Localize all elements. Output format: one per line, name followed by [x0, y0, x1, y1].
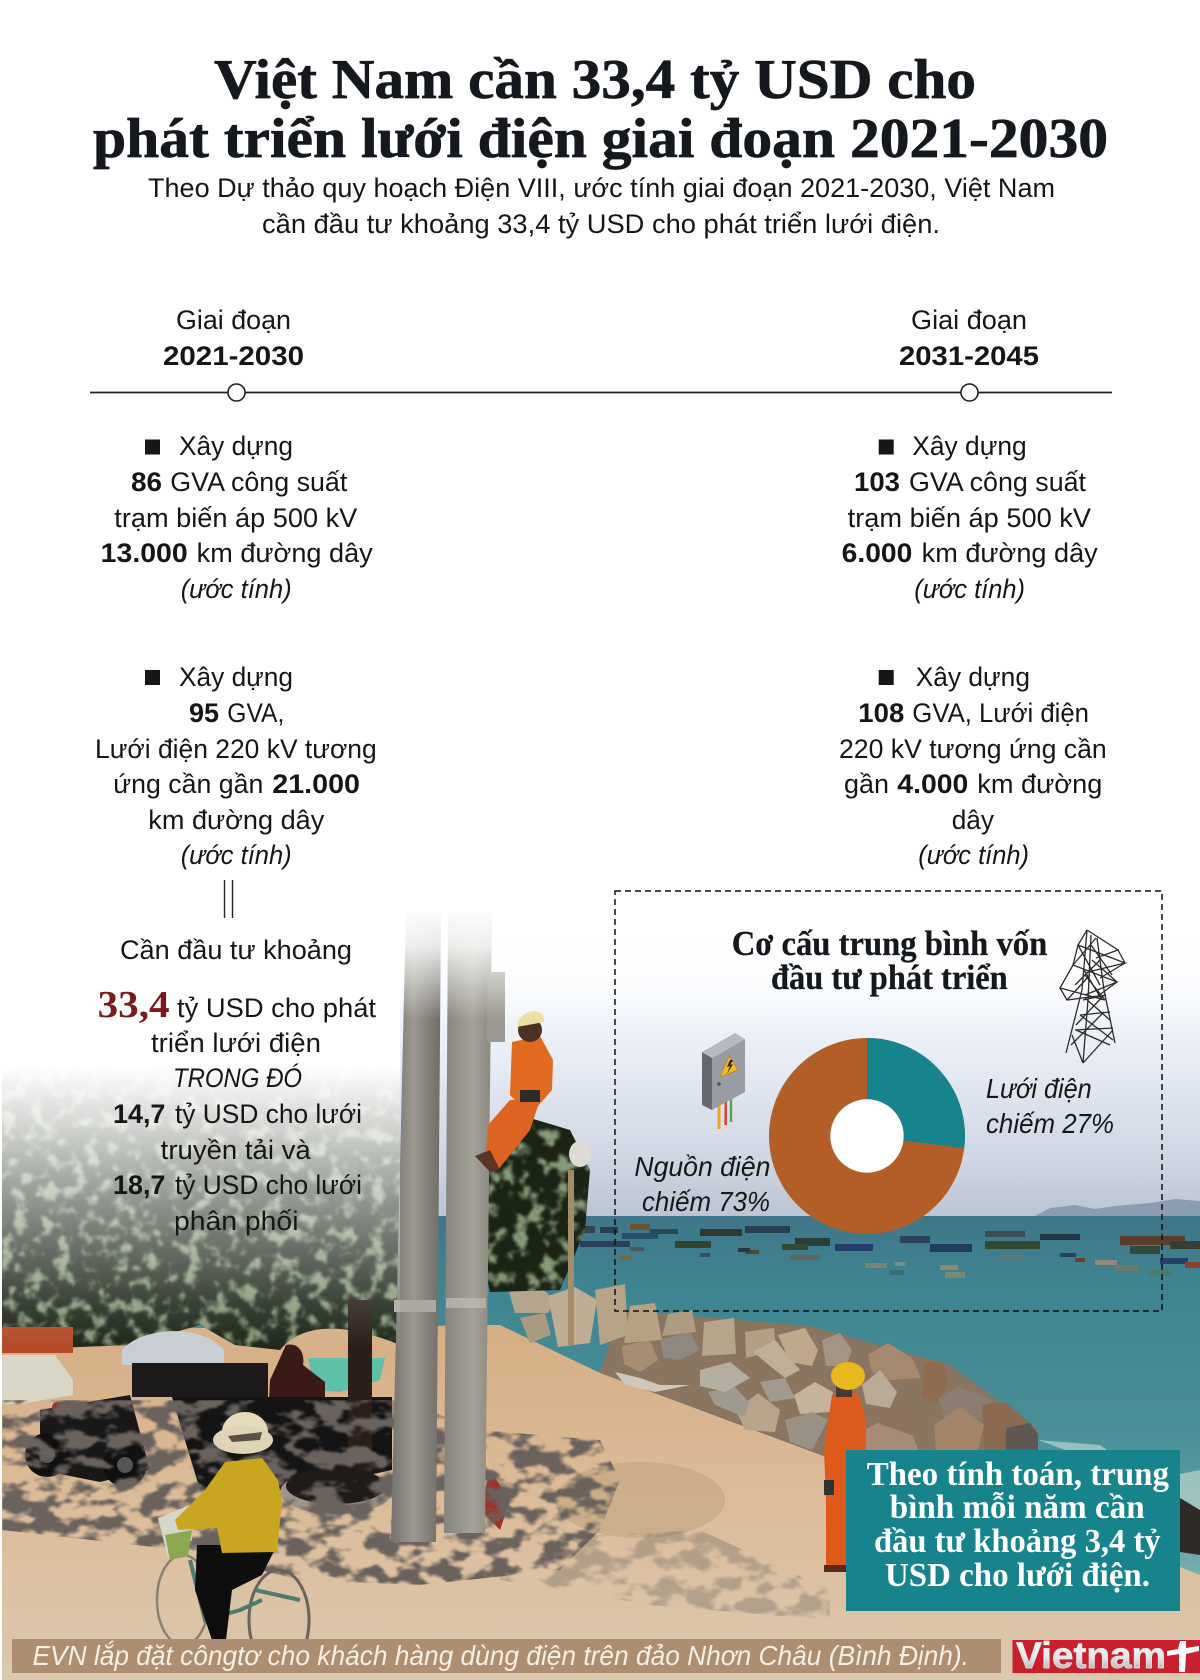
period label 2021-2030: 2021-2030 — [163, 341, 304, 371]
text block: 2031-2045 220 kV: GVA, Lưới điện — [912, 698, 1089, 728]
title: Việt Nam cần 33,4 tỷ USD cho — [214, 49, 976, 111]
text block: 2031-2045 500 kV: 6.000 — [842, 538, 912, 568]
foam at shore — [1038, 1440, 1200, 1510]
text block: 2031-2045 220 kV: gần — [844, 769, 889, 799]
left tree foliage — [2, 1052, 400, 1350]
dark rock right — [1180, 1498, 1200, 1555]
cyclist — [157, 1412, 309, 1670]
investment text block: phân phối — [174, 1206, 298, 1236]
callout: average yearly investment — [846, 1450, 1180, 1611]
text block: 2031-2045 220 kV — [839, 662, 1107, 870]
text block: 2021-2030 220 kV: Xây dựng — [179, 662, 293, 692]
donut chart — [769, 1038, 965, 1234]
subtitle: cần đầu tư khoảng 33,4 tỷ USD cho phát triển lưới điện. — [262, 209, 940, 239]
text block: 2021-2030 500 kV: (ước tính) — [181, 574, 292, 604]
tree behind poles — [470, 1115, 590, 1292]
sky — [2, 912, 1200, 1216]
climbing worker — [475, 1011, 553, 1172]
distant mountains — [1035, 1199, 1200, 1216]
callout: average yearly investment: đầu tư khoảng 3,4 tỷ — [874, 1523, 1161, 1560]
text block: 2031-2045 500 kV: trạm biến áp 500 kV — [848, 503, 1091, 533]
thin post with dish — [568, 1141, 591, 1345]
investment text block: TRONG ĐÓ — [173, 1063, 302, 1093]
text block: 2031-2045 500 kV: 103 — [854, 467, 900, 497]
title: phát triển lưới điện giai đoạn 2021-2030 — [93, 108, 1108, 170]
period label 2031-2045: Giai đoạn — [911, 305, 1027, 335]
text block: 2021-2030 220 kV — [95, 662, 377, 870]
logo: Vietnam+: Vietnam — [1016, 1635, 1166, 1676]
period label 2021-2030 — [163, 305, 304, 371]
boats — [565, 1224, 1200, 1278]
text block: 2021-2030 500 kV: trạm biến áp 500 kV — [114, 503, 358, 533]
investment text block — [98, 935, 377, 1236]
photo: coastal scene with electricity workers — [0, 905, 1200, 1680]
text block: 2021-2030 220 kV: 95 — [189, 698, 219, 728]
text block: 2021-2030 500 kV: km đường dây — [197, 538, 373, 568]
text block: 2031-2045 500 kV — [842, 431, 1098, 604]
label: source share: Nguồn điện — [634, 1151, 770, 1182]
text block: 2021-2030 220 kV: (ước tính) — [181, 840, 292, 870]
text block: 2021-2030 220 kV: km đường dây — [148, 805, 325, 835]
text block: 2021-2030 220 kV: 21.000 — [272, 769, 360, 799]
text block: 2021-2030 500 kV — [101, 431, 373, 604]
puddle — [555, 1462, 725, 1538]
callout: average yearly investment: bình mỗi năm cần — [890, 1489, 1145, 1526]
callout: average yearly investment: Theo tính toán, trung — [867, 1456, 1169, 1493]
text block: 2031-2045 220 kV: 108 — [858, 698, 904, 728]
objects under the tree — [2, 1300, 510, 1530]
ground shadow — [2, 1400, 830, 1620]
text block: 2031-2045 220 kV: (ước tính) — [918, 840, 1029, 870]
text block: 2031-2045 500 kV: (ước tính) — [914, 574, 1025, 604]
rock breakwater — [509, 1284, 1038, 1457]
text block: 2031-2045 220 kV: Xây dựng — [916, 662, 1030, 692]
text block: 2021-2030 220 kV: GVA, — [227, 698, 284, 728]
text block: 2031-2045 220 kV: 220 kV tương ứng cần — [839, 734, 1107, 764]
text block: 2031-2045 220 kV: dây — [952, 805, 995, 835]
equals sign connector — [224, 880, 232, 918]
chart heading: Cơ cấu trung bình vốn — [732, 924, 1047, 963]
text block: 2021-2030 500 kV: 13.000 — [101, 538, 188, 568]
text block: 2021-2030 500 kV: GVA công suất — [170, 467, 348, 497]
callout: average yearly investment: USD cho lưới điện. — [885, 1557, 1150, 1594]
label: grid share: chiếm 27% — [986, 1108, 1114, 1139]
standing worker — [824, 1362, 866, 1572]
investment text block: 18,7 — [113, 1170, 165, 1200]
text block: 2031-2045 500 kV: Xây dựng — [912, 431, 1027, 461]
poles — [391, 912, 505, 1542]
text block: 2021-2030 500 kV: 86 — [131, 467, 162, 497]
investment text block: tỷ USD cho lưới — [175, 1170, 362, 1200]
text block: 2031-2045 500 kV: km đường dây — [922, 538, 1098, 568]
period label 2031-2045 — [899, 305, 1039, 371]
label: grid share: Lưới điện — [986, 1073, 1092, 1104]
investment text block: tỷ USD cho lưới — [175, 1099, 362, 1129]
text block: 2031-2045 220 kV: km đường — [977, 769, 1102, 799]
text block: 2021-2030 500 kV: Xây dựng — [179, 431, 293, 461]
text block: 2021-2030 220 kV: ứng cần gần — [113, 769, 263, 799]
label: grid share — [986, 1073, 1114, 1139]
title — [93, 49, 1108, 170]
subtitle — [148, 173, 1055, 239]
sea — [2, 1216, 1200, 1580]
timeline — [90, 384, 1112, 401]
icon: electric meter box — [702, 1033, 745, 1129]
chart heading: đầu tư phát triển — [771, 958, 1008, 997]
ground: sandy road — [0, 1325, 1200, 1680]
text block: 2031-2045 220 kV: 4.000 — [897, 769, 968, 799]
label: source share: chiếm 73% — [642, 1186, 770, 1217]
investment text block: tỷ USD cho phát — [177, 993, 377, 1023]
investment text block: 14,7 — [113, 1099, 165, 1129]
subtitle: Theo Dự thảo quy hoạch Điện VIII, ước tính giai đoạn 2021-2030, Việt Nam — [148, 173, 1055, 203]
white fade top — [0, 905, 1200, 1020]
period label 2031-2045: 2031-2045 — [899, 341, 1039, 371]
period label 2021-2030: Giai đoạn — [176, 305, 291, 335]
text block: 2031-2045 500 kV: GVA công suất — [909, 467, 1087, 497]
investment text block: 33,4 — [98, 984, 170, 1026]
investment text block: truyền tải và — [161, 1135, 311, 1165]
chart heading — [732, 924, 1047, 997]
panel: capital structure — [615, 891, 1162, 1311]
white fade behind left text — [0, 905, 400, 1350]
investment text block: Cần đầu tư khoảng — [120, 935, 352, 965]
icon: transmission tower — [1060, 930, 1125, 1063]
label: source share — [634, 1151, 770, 1217]
investment text block: triển lưới điện — [151, 1028, 321, 1058]
caption bar: EVN lắp đặt côngtơ cho khách hàng dùng điện trên đảo Nhơn Châu (Bình Định). — [32, 1640, 969, 1671]
text block: 2021-2030 220 kV: Lưới điện 220 kV tương — [95, 734, 377, 764]
